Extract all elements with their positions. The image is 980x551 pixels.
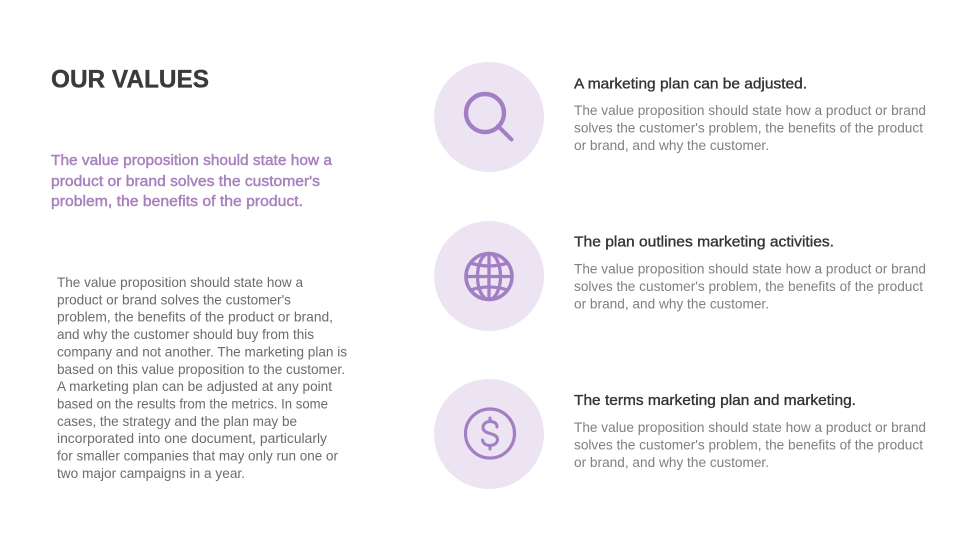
lead statement: product or brand solves the customer's (51, 173, 320, 190)
body paragraph: The value proposition should state how a (57, 275, 303, 290)
item 2 text: or brand, and why the customer. (574, 296, 769, 312)
body paragraph: two major campaigns in a year. (57, 466, 245, 481)
body paragraph: product or brand solves the customer's (57, 292, 291, 307)
body paragraph: problem, the benefits of the product or brand, (57, 310, 333, 325)
icon: globe (434, 221, 544, 331)
body paragraph: based on this value proposition to the customer. (57, 362, 345, 377)
item 1 heading: A marketing plan can be adjusted. (574, 76, 807, 92)
item 1 text (574, 103, 926, 153)
icon: dollar coin (434, 379, 544, 489)
item 2 text: The value proposition should state how a product or brand (574, 262, 926, 276)
item 1 text: The value proposition should state how a product or brand (574, 103, 926, 118)
body paragraph: and why the customer should buy from this (57, 327, 314, 342)
item 1 text: or brand, and why the customer. (574, 138, 769, 153)
lead statement: The value proposition should state how a (51, 152, 333, 169)
body paragraph: based on the results from the metrics. In some (57, 396, 328, 411)
item 3: terms marketing plan (574, 392, 926, 470)
item 3 text: The value proposition should state how a product or brand (574, 420, 926, 435)
item 1 text: solves the customer's problem, the benefits of the product (574, 120, 923, 136)
item 2 heading: The plan outlines marketing activities. (574, 234, 834, 250)
body paragraph: A marketing plan can be adjusted at any point (57, 379, 332, 394)
item 2: plan outlines activities (574, 234, 926, 312)
body paragraph: cases, the strategy and the plan may be (57, 414, 297, 429)
lead statement (51, 152, 333, 210)
lead statement: problem, the benefits of the product. (51, 193, 303, 210)
item 3 text: or brand, and why the customer. (574, 455, 769, 470)
item 3 heading: The terms marketing plan and marketing. (574, 392, 856, 409)
body paragraph: company and not another. The marketing plan is (57, 344, 347, 359)
body paragraph (57, 275, 347, 481)
item 2 text (574, 262, 926, 312)
icon: magnifying glass (434, 62, 544, 172)
body paragraph: for smaller companies that may only run one or (57, 448, 338, 464)
item 3 text: solves the customer's problem, the benefits of the product (574, 438, 923, 452)
body paragraph: incorporated into one document, particularly (57, 431, 327, 446)
item 1: marketing plan adjusted (574, 76, 926, 153)
title: OUR VALUES (51, 66, 209, 94)
item 2 text: solves the customer's problem, the benefits of the product (574, 279, 923, 294)
item 3 text (574, 420, 926, 470)
